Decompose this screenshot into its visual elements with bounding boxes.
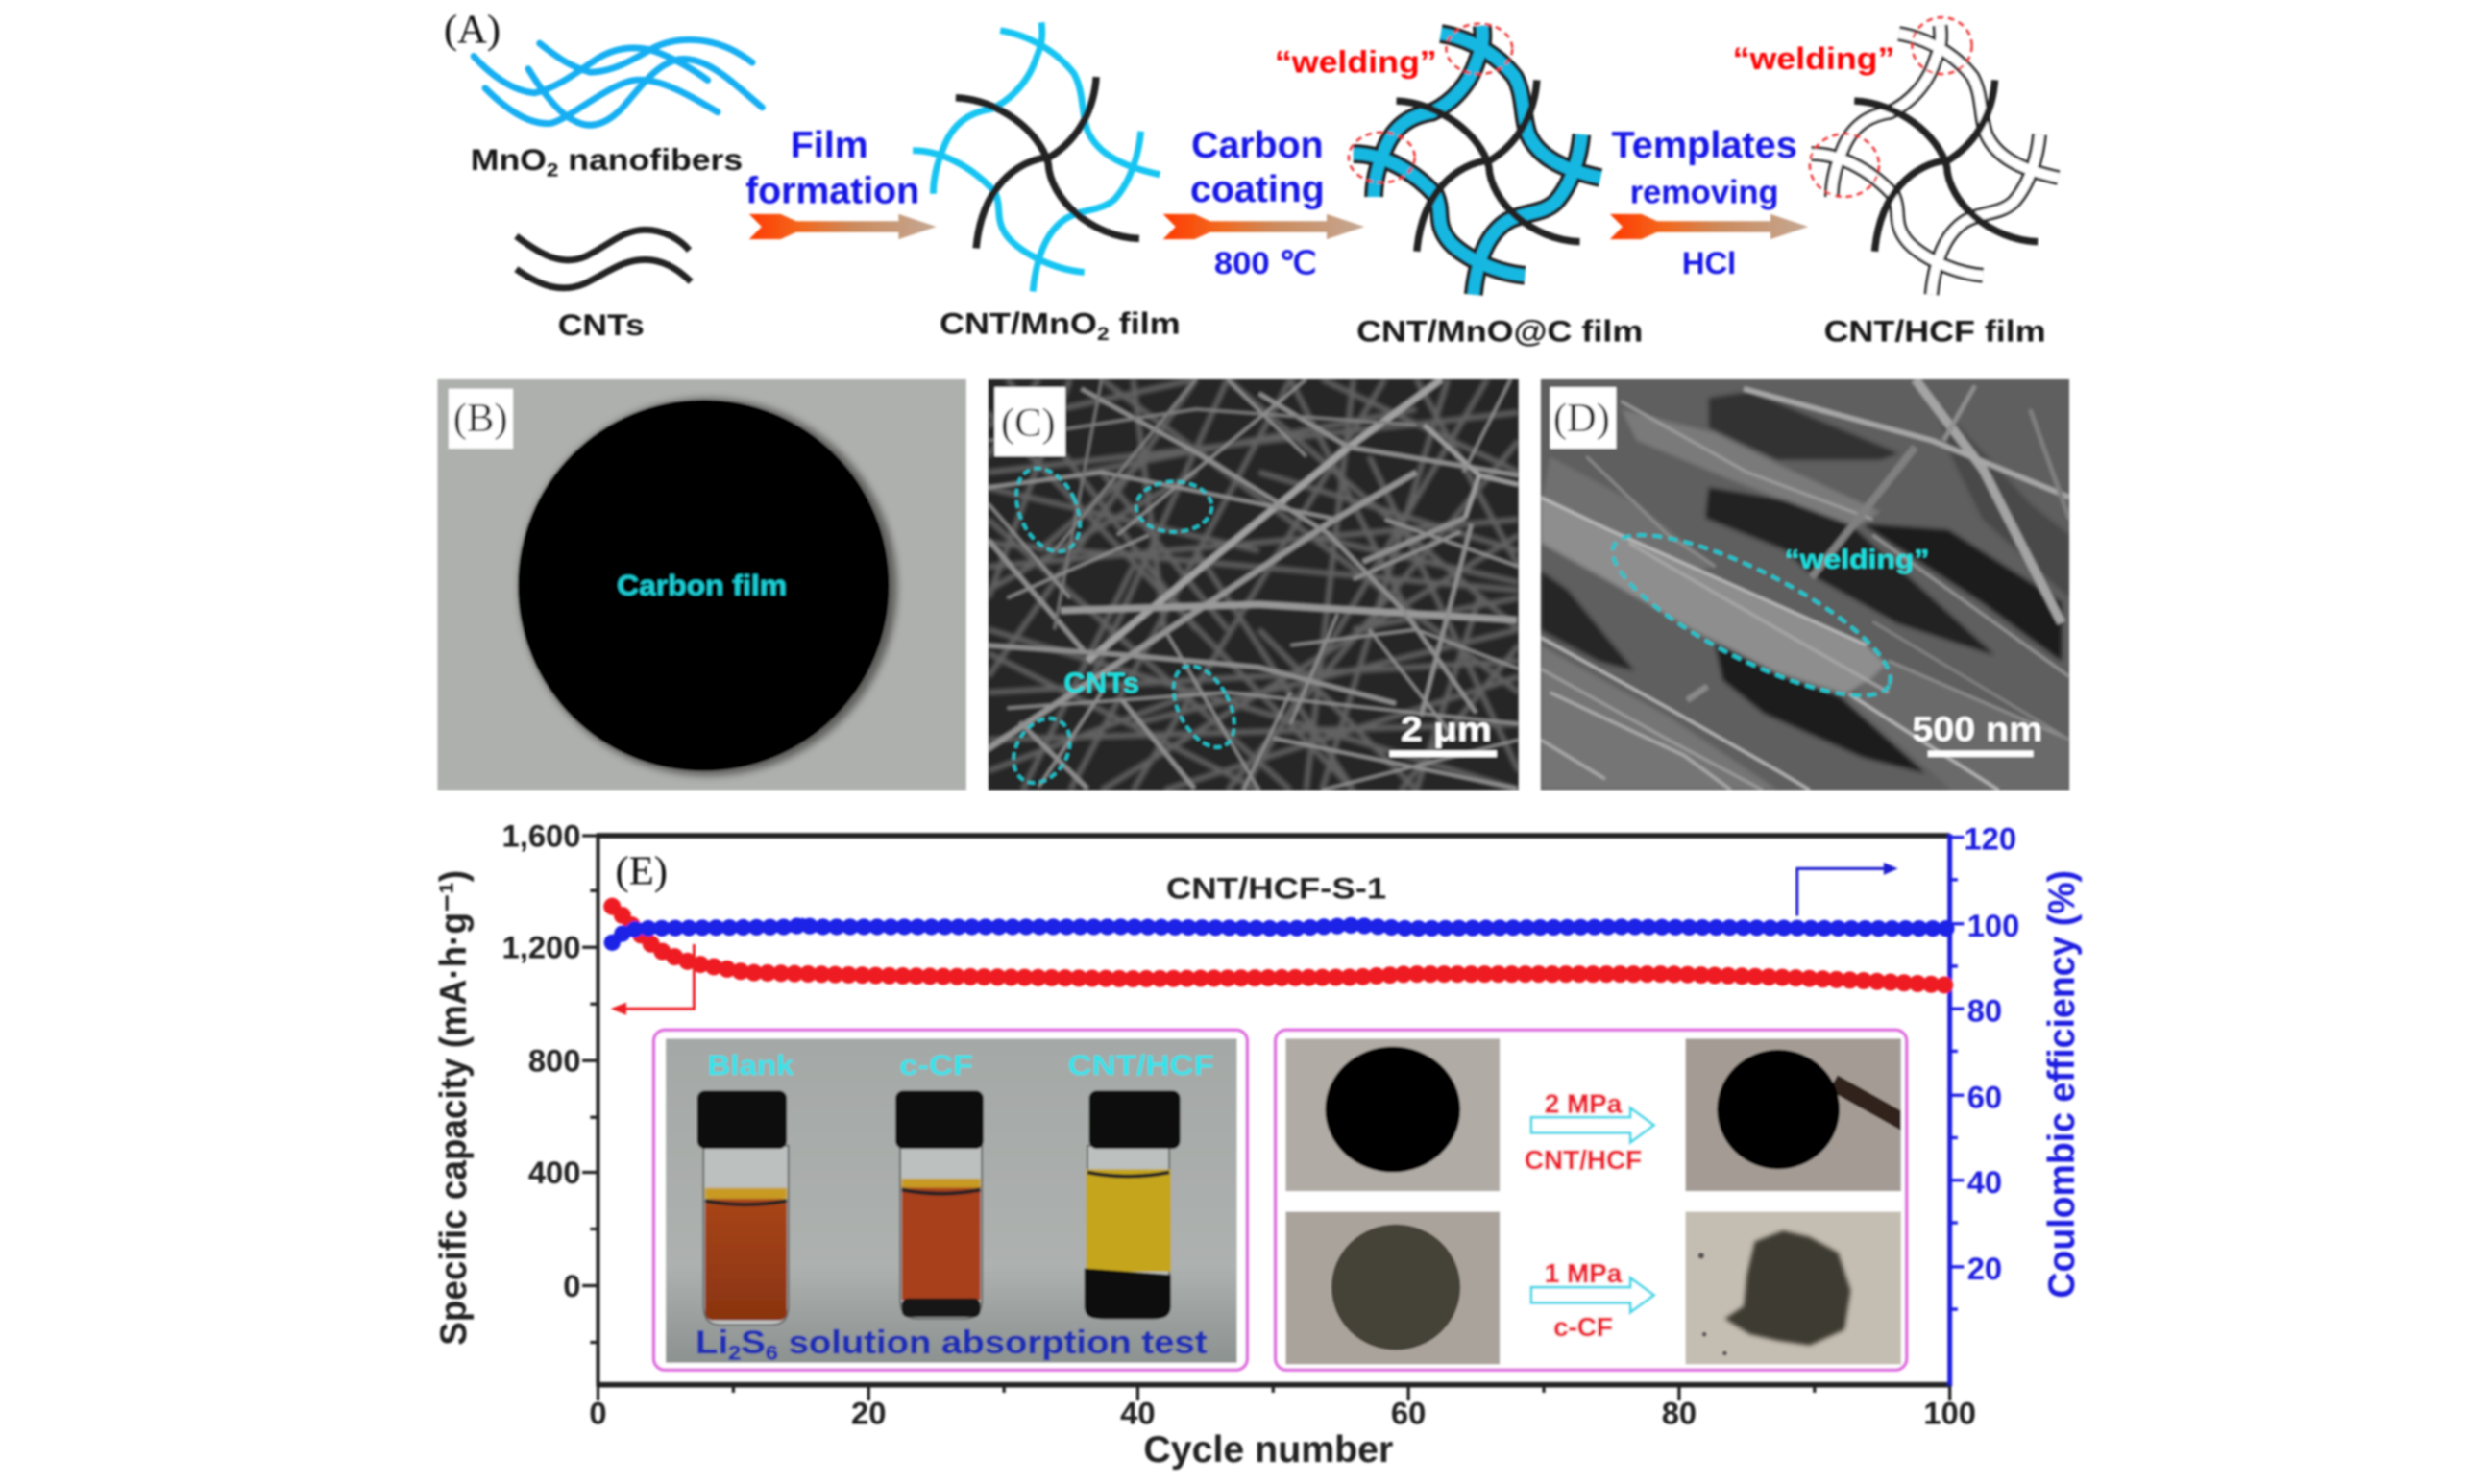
- film: CNT/HCF hollow: [1812, 26, 2059, 295]
- axes frame: [582, 834, 1964, 1400]
- text: Templates removing: Templates: [1611, 124, 1797, 166]
- welding circles on CNT/HCF: [1810, 17, 1972, 197]
- left axis tick labels: 400: [528, 1155, 580, 1190]
- x axis tick labels: [589, 1396, 1976, 1431]
- right axis tick labels: 40: [1967, 1164, 2002, 1200]
- label: welding: “welding”: [1785, 544, 1929, 573]
- left axis tick labels: 1,600: [502, 817, 580, 853]
- vial: c-CF: [895, 1090, 984, 1319]
- right axis title: Coulombic efficiency (%): [2040, 870, 2083, 1299]
- figure: [432, 7, 2083, 1471]
- dashed ellipse: [1594, 506, 1909, 724]
- x axis tick labels: 80: [1662, 1396, 1697, 1431]
- scale label: 500 nm: [1912, 710, 2042, 749]
- label: CNT/MnO@C film: CNT/MnO@C film: [1356, 315, 1643, 349]
- panel B: carbon film photo: [437, 379, 966, 790]
- text: Film formation: Film: [791, 124, 868, 166]
- label box B: [449, 389, 513, 449]
- panel C: SEM of fibers: [985, 379, 1519, 793]
- left axis tick labels: 0: [563, 1268, 580, 1303]
- x axis title: Cycle number: [1143, 1428, 1393, 1471]
- photo: c-CF after: [1685, 1211, 1901, 1364]
- label: MnO2 nanofibers: 2: [547, 160, 558, 182]
- panel A: synthesis schematic: [444, 7, 2059, 349]
- caption: solution absorption test: [778, 1325, 1208, 1361]
- SEM image: [1541, 379, 2069, 790]
- arrow: templates removing: [1610, 214, 1808, 239]
- film: CNT/MnO2: [913, 22, 1160, 291]
- label: MnO2 nanofibers: MnO: [471, 143, 537, 177]
- text: Carbon coating: Carbon: [1191, 124, 1324, 166]
- vial: blank: [697, 1090, 789, 1325]
- text: 800 C: 800 ℃: [1214, 245, 1316, 280]
- carbon disc: [518, 400, 890, 771]
- arrow: film formation: [749, 214, 937, 239]
- film: CNT/MnO@C: [1354, 26, 1600, 295]
- right axis tick labels: 80: [1967, 992, 2002, 1028]
- arrow: 2 MPa: [1531, 1107, 1654, 1142]
- arrow: to right axis: [1797, 868, 1887, 916]
- x axis tick labels: 0: [589, 1396, 607, 1431]
- arrow: to left axis: [623, 944, 694, 1009]
- icon: CNTs: [516, 230, 691, 288]
- right axis tick labels: [1964, 821, 2019, 1286]
- panel D: SEM close-up: [1541, 379, 2069, 790]
- inset: Li2S6 absorption test: [654, 1030, 1247, 1370]
- SEM image: [985, 379, 1519, 790]
- icon: MnO2 nanofibers: [474, 39, 762, 125]
- caption: 6: [766, 1341, 778, 1364]
- sample title: CNT/HCF-S-1: [1166, 871, 1386, 905]
- inset frame: [1276, 1030, 1907, 1370]
- x axis tick labels: 60: [1391, 1396, 1426, 1431]
- right axis tick labels: 120: [1964, 821, 2016, 857]
- text: Carbon coating: coating: [1190, 168, 1325, 210]
- label D: (D): [1553, 396, 1610, 441]
- x axis tick labels: 100: [1923, 1396, 1976, 1431]
- photo background: [666, 1038, 1237, 1363]
- label A: (A): [444, 7, 501, 52]
- welding circles on CNT/MnO@C: [1349, 24, 1512, 182]
- label C: (C): [1001, 401, 1056, 446]
- left axis tick labels: 1,200: [502, 930, 580, 965]
- text: Film formation: [745, 124, 919, 211]
- label: 1 MPa: 1 MPa: [1545, 1258, 1623, 1288]
- inset: mechanical pressure test: [1276, 1030, 1912, 1370]
- label: MnO2 nanofibers: nanofibers: [558, 143, 743, 177]
- inset frame: [654, 1030, 1247, 1370]
- left axis tick labels: 800: [528, 1043, 580, 1079]
- vial: CNT/HCF: [1085, 1090, 1181, 1319]
- label: Carbon film: Carbon film: [617, 570, 787, 601]
- label: 2 MPa: 2 MPa: [1545, 1088, 1623, 1118]
- label: welding: “welding”: [1733, 40, 1894, 76]
- label: CNT/HCF film: CNT/HCF film: [1824, 315, 2046, 349]
- text: Carbon coating: [1190, 124, 1325, 210]
- arrow: carbon coating: [1163, 214, 1364, 239]
- label: CNT/MnO2 film: CNT/MnO: [940, 306, 1076, 340]
- caption: S: [741, 1325, 766, 1361]
- label: Blank: Blank: [707, 1050, 794, 1082]
- caption: Li: [696, 1325, 725, 1361]
- label: CNTs: CNTs: [558, 308, 645, 342]
- series: coulombic efficiency: [612, 924, 1946, 942]
- scale label: 2 μm: [1401, 710, 1492, 749]
- left axis title: Specific capacity (mA·h·g⁻¹): [432, 870, 475, 1346]
- label E: (E): [616, 849, 668, 894]
- scale bar: [1928, 751, 2034, 757]
- photo: CNT/HCF before: [1285, 1038, 1500, 1191]
- label: CNT/HCF: CNT/HCF: [1067, 1050, 1214, 1082]
- photo: c-CF before: [1285, 1211, 1500, 1364]
- x axis tick labels: 20: [851, 1396, 886, 1431]
- text: HCl: HCl: [1682, 245, 1736, 280]
- label: CNT/HCF: CNT/HCF: [1525, 1145, 1642, 1175]
- left axis tick labels: [502, 817, 580, 1303]
- panel E: cycling chart: [432, 817, 2083, 1471]
- series: specific capacity: [612, 907, 1946, 985]
- label: c-CF: c-CF: [1553, 1312, 1613, 1342]
- right axis tick labels: 20: [1967, 1251, 2002, 1286]
- arrow: 1 MPa: [1531, 1277, 1654, 1312]
- right axis tick labels: 60: [1967, 1079, 2002, 1114]
- photo: CNT/HCF after: [1685, 1038, 1912, 1191]
- photo background: [437, 379, 966, 790]
- label: CNT/MnO2 film: film: [1110, 306, 1181, 340]
- label box D: [1550, 387, 1616, 449]
- scale bar: [1389, 751, 1497, 757]
- text: Templates removing: removing: [1630, 174, 1779, 210]
- text: Templates removing: [1611, 124, 1797, 210]
- caption: 2: [728, 1341, 741, 1364]
- right axis tick labels: 100: [1967, 908, 2019, 943]
- label: welding: “welding”: [1275, 43, 1437, 79]
- label: CNT/MnO2 film: 2: [1097, 324, 1110, 345]
- label: CNTs: CNTs: [1063, 668, 1139, 699]
- dashed ellipses: [1002, 458, 1247, 793]
- x axis tick labels: 40: [1120, 1396, 1156, 1431]
- text: Film formation: formation: [745, 169, 919, 211]
- label: c-CF: c-CF: [899, 1050, 973, 1082]
- label B: (B): [453, 396, 508, 441]
- label box C: [994, 387, 1065, 456]
- shadow: [520, 399, 897, 776]
